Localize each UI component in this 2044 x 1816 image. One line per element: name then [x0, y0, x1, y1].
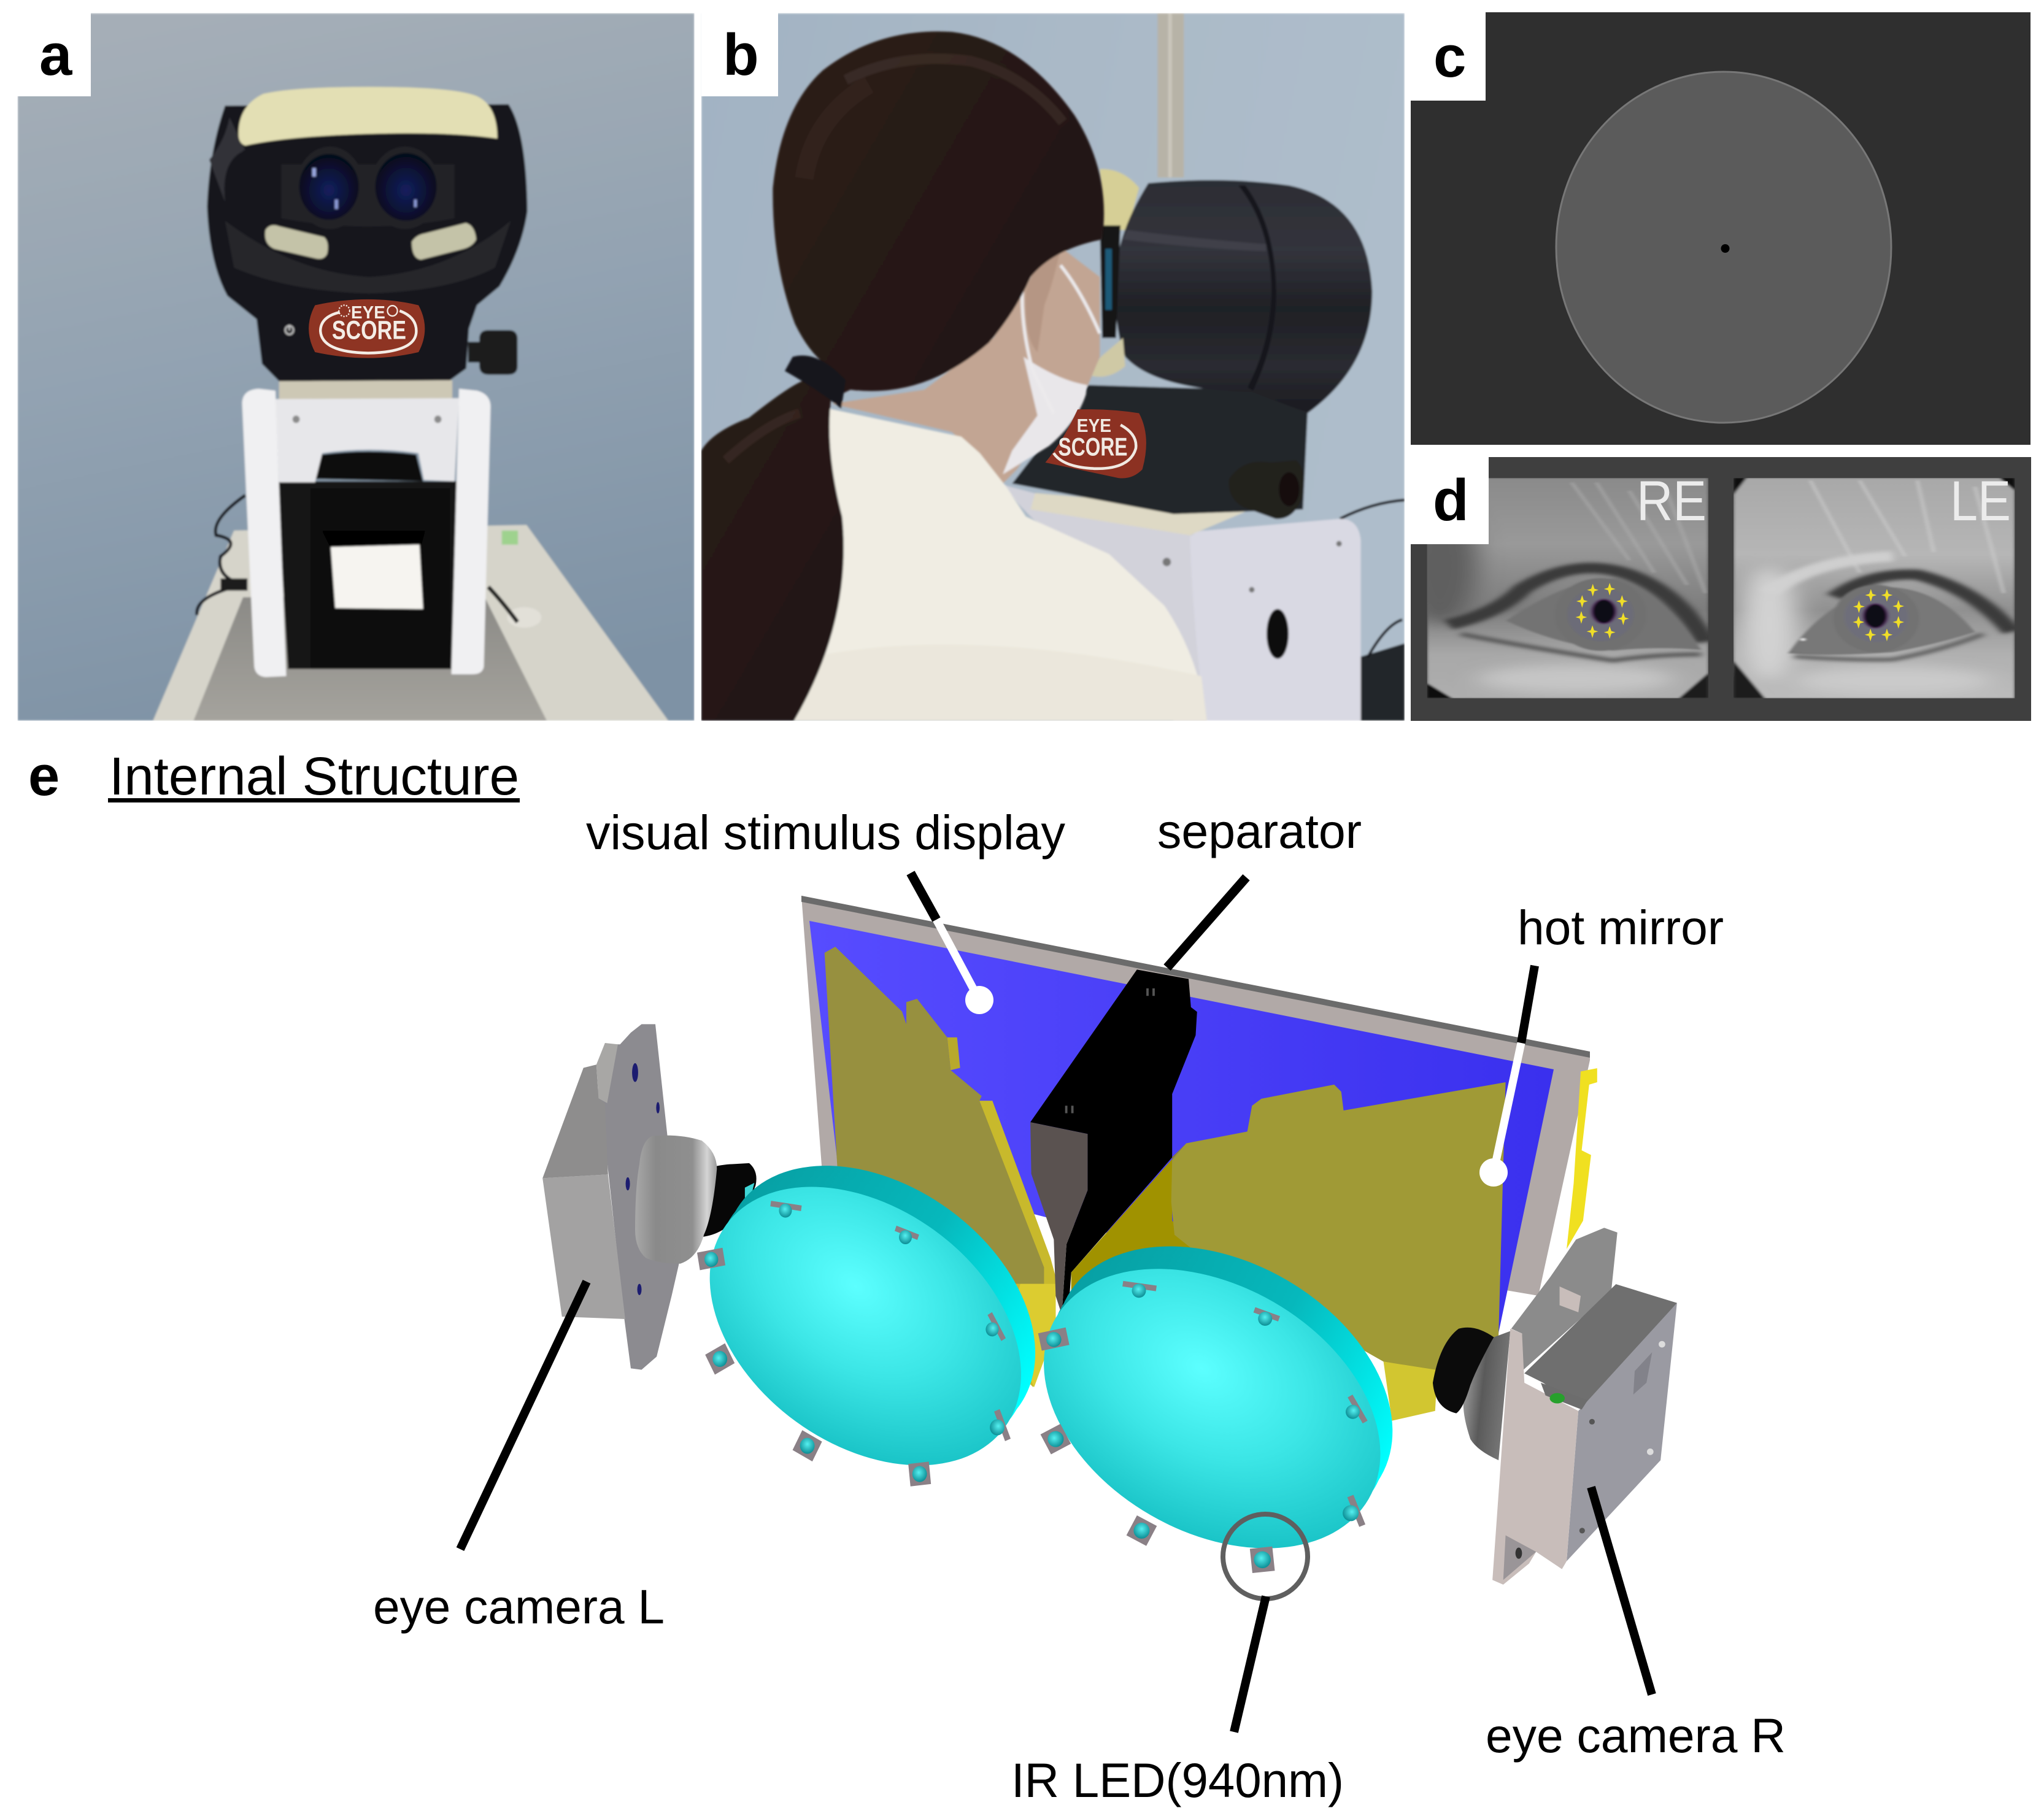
- label: separator: separator: [1157, 804, 1362, 858]
- callout: IR LED circle: [1223, 1514, 1308, 1599]
- separator: [1030, 969, 1197, 1315]
- leader line: IR LED: [1234, 1596, 1266, 1732]
- panel d: eye camera views: [1403, 457, 2031, 721]
- panel label: a: a: [39, 22, 72, 88]
- logo: side view of badge: EYE: [1077, 416, 1111, 436]
- logo: EYE SCORE badge: EYE: [351, 302, 385, 323]
- left camera lens barrel: [700, 1163, 757, 1237]
- right hot mirror: [1071, 1082, 1506, 1421]
- panel label: e: e: [28, 745, 60, 807]
- panel a: photo of the device from the front: [18, 13, 695, 721]
- display frame: [801, 896, 1590, 1333]
- logo: side view of badge: SCORE: [1059, 433, 1127, 461]
- label: hot mirror: hot mirror: [1518, 900, 1724, 955]
- label: IR LED(940nm): IR LED(940nm): [1011, 1753, 1344, 1807]
- left lens: [665, 1109, 1081, 1523]
- diagram: internal structure 3D render: [542, 896, 1677, 1606]
- panel label: c: c: [1433, 24, 1466, 90]
- IR LEDs, right lens: [1038, 1281, 1368, 1573]
- panel b: photo of subject using the device: [701, 13, 1405, 721]
- logo: side view of badge: [1045, 409, 1146, 479]
- panel label: b: b: [723, 22, 759, 88]
- eye camera L: [542, 1024, 717, 1370]
- text: RE: RE: [1637, 470, 1707, 533]
- left eye image: [1734, 478, 2015, 698]
- leader line: hot mirror: [1479, 966, 1535, 1187]
- panel label: d: d: [1433, 467, 1469, 533]
- leader line: eye camera L: [460, 1282, 587, 1549]
- panel label: b: [701, 13, 778, 96]
- panel label: d: [1411, 457, 1489, 544]
- logo: EYE SCORE badge: SCORE: [332, 315, 406, 345]
- leader line: visual stimulus display: [911, 873, 993, 1014]
- left hot mirror: [825, 947, 1055, 1387]
- text: LE: LE: [1950, 470, 2011, 533]
- eye camera R: [1433, 1228, 1677, 1585]
- label: eye camera R: eye camera R: [1486, 1708, 1786, 1763]
- IR LEDs, left lens: [697, 1201, 1011, 1487]
- yellow rear edge of right hot mirror: [1567, 1068, 1597, 1249]
- label: eye camera L: eye camera L: [373, 1579, 665, 1634]
- heading: Internal Structure: Internal Structure: [109, 747, 519, 806]
- logo: EYE SCORE badge: [309, 299, 425, 358]
- right eye image: [1403, 478, 1708, 698]
- panel label: a: [17, 13, 91, 96]
- panel c: visual stimulus screen with fixation target: [1411, 12, 2031, 445]
- leader line: separator: [1167, 877, 1246, 968]
- label: visual stimulus display: visual stimulus display: [586, 805, 1065, 860]
- right lens: [994, 1189, 1443, 1606]
- leader line: eye camera R: [1591, 1487, 1652, 1695]
- panel label: c: [1411, 12, 1486, 101]
